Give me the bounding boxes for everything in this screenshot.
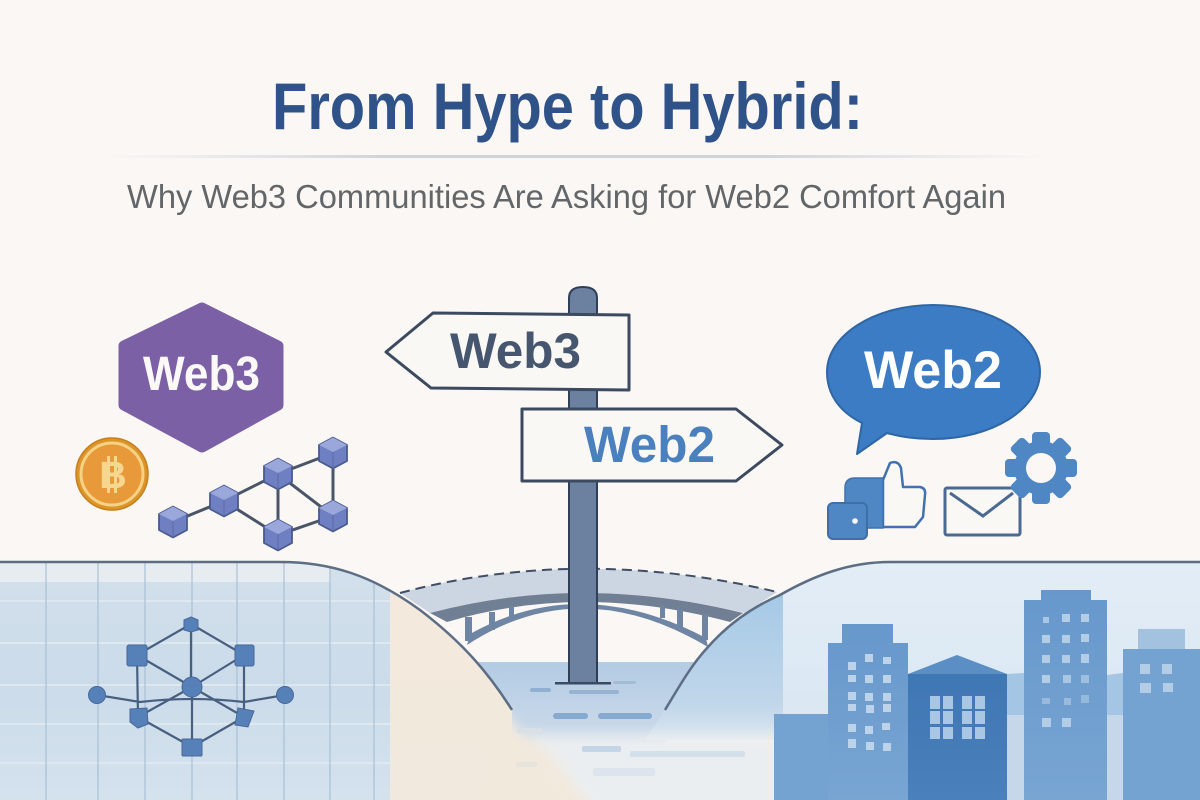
beige hillside [390, 592, 512, 800]
left hill outline [0, 562, 512, 710]
lower haze [530, 735, 800, 800]
windows: centre [930, 696, 985, 739]
title: From Hype to Hybrid: [272, 69, 863, 143]
badge: Web3 hexagon: Web3 [143, 348, 260, 401]
windows: right [1140, 664, 1173, 693]
windows: tower left [848, 654, 891, 751]
water ripples [516, 681, 745, 776]
badge: Web3 hexagon [124, 308, 278, 447]
beige lower fade [470, 705, 610, 800]
building: right [1123, 629, 1200, 800]
sign: Web2 [522, 409, 782, 481]
hill slope [645, 592, 783, 740]
far buildings [1007, 673, 1123, 800]
sign: Web3: Web3 [450, 323, 581, 379]
icon: envelope [945, 488, 1020, 535]
icon: bitcoin coin [76, 438, 148, 510]
blockchain cubes [159, 438, 347, 550]
subtitle: Why Web3 Communities Are Asking for Web2 Comfort Again [127, 178, 1006, 215]
icon: thumbs up [828, 462, 925, 539]
right landscape [530, 562, 1200, 800]
panel: blue grid [0, 562, 390, 800]
building: tower left [828, 624, 908, 800]
building: far left [774, 714, 828, 800]
network on left panel [88, 617, 294, 756]
building: centre [908, 655, 1007, 800]
speech bubble: Web2 [827, 305, 1040, 454]
windows: tall [1042, 614, 1089, 727]
water [470, 662, 700, 800]
sign: Web3 [386, 313, 629, 390]
building: tall [1024, 590, 1107, 800]
icon: gear [1005, 432, 1077, 504]
sign: Web2: Web2 [584, 416, 715, 473]
icon: bitcoin coin: B [99, 455, 127, 497]
signpost [386, 287, 782, 684]
panel: right sky [783, 562, 1200, 800]
post base [555, 682, 611, 684]
right hill outline [665, 562, 1200, 710]
left landscape [0, 560, 610, 800]
speech bubble: Web2: Web2 [864, 341, 1002, 400]
bridge [400, 569, 777, 647]
post [569, 287, 597, 683]
